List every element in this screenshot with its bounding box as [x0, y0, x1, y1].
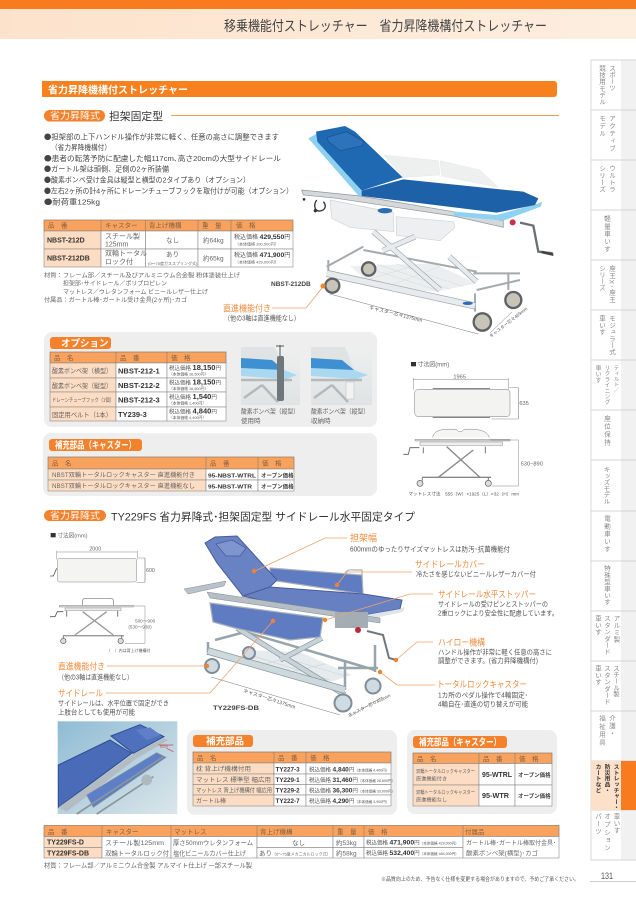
tab labels: スタンダード — [602, 665, 611, 705]
dimension: caster pitch: キャスター芯々469mm — [488, 305, 529, 340]
spec table: TY229FS: TY229FS-D — [47, 840, 84, 846]
photo captions: 使用時 — [241, 416, 261, 425]
parts table: TY227-3 — [276, 766, 300, 774]
photo captions: 収納時 — [311, 416, 331, 425]
model heading: 担架固定型 — [44, 109, 559, 123]
caster table: NBST双輪トータルロックキャスター 直進機能付き — [52, 471, 195, 479]
panel: replacement parts TY229 — [187, 730, 397, 815]
dimension: caster pitch TY229: キャスター芯々459mm — [347, 692, 392, 719]
callout: ハイロー機構: 調整ができます。(省力昇降機構付) — [438, 656, 538, 665]
materials note: マットレス／ウレタンフォーム ビニールレザー仕上げ — [63, 288, 208, 296]
options table: 固定用ベルト（1本） — [52, 410, 112, 419]
ghost side rails — [383, 155, 498, 187]
active tab: ストレッチャー・ — [612, 764, 619, 810]
callout: 担架幅 — [252, 532, 510, 573]
tab labels: 介護・ — [608, 715, 616, 737]
crank handle — [367, 631, 396, 660]
dimension drawing: TY229FS: (530〜930) — [128, 624, 152, 629]
parts table: ガートル棒 — [196, 797, 226, 805]
spec table: TY229FS: なし — [292, 839, 305, 847]
casters — [325, 262, 521, 331]
callout: サイドレール水平ストッパー: 2重ロックにより安全性に配慮しています。 — [438, 608, 558, 618]
dimension drawing: TY229FS — [50, 531, 156, 653]
callout: サイドレールカバー — [335, 560, 536, 587]
parts table: 税込価格 4,290円（本体価格 3,900円） — [309, 797, 389, 805]
options table: 税込価格 18,150円 — [169, 378, 221, 386]
stretcher illustration TY229FS-DB — [184, 536, 405, 712]
spec table: TY229FS: 付属品 — [465, 827, 484, 836]
callout: ハイロー機構 — [394, 636, 552, 665]
spec table: NBST-212: 約64kg — [203, 236, 224, 244]
callout: 直進機能付き: 直進機能付き — [223, 302, 271, 314]
pill heading: 補充部品 — [206, 736, 244, 748]
spec table: NBST-212: （本体価格 429,000円） — [235, 259, 279, 265]
caster table: 直進機能付き — [416, 774, 447, 782]
spec table: NBST-212: 双輪トータル — [105, 248, 147, 258]
callout: サイドレール水平ストッパー: サイドレールの受けピンとストッパーの — [438, 600, 548, 608]
caster table: 95-NBST-WTRL — [208, 473, 257, 479]
caster table: 双輪トータルロックキャスター — [416, 788, 475, 796]
tab labels — [594, 64, 620, 852]
tab labels: アクティブ — [608, 115, 616, 152]
callout: 直進機能付き left: （他の3軸は直進機能なし） — [58, 672, 133, 682]
top frame — [302, 190, 503, 227]
spec table: NBST-212 — [44, 220, 293, 267]
spec table: TY229FS: 塩化ビニールカバー仕上げ — [173, 848, 246, 858]
materials note: 付属品：ガートル棒･ガートル受け金具(2ヶ所)･カゴ — [44, 296, 187, 304]
header band — [0, 0, 636, 39]
options table: 酸素ボンベ架（縦型） — [52, 381, 112, 390]
top frame and mechanism — [207, 592, 380, 623]
dimension: caster pitch TY229: キャスター芯々1375mm — [242, 687, 296, 711]
spec table: TY229FS: 背上げ機構 — [260, 827, 293, 836]
callout: トータルロックキャスター: 1カ所のペダル操作で4輪固定･ — [438, 690, 528, 700]
callout: サイドレール left: 上肢台としても使用が可能 — [58, 708, 135, 716]
spec table: TY229FS: キャスター — [106, 827, 138, 836]
pillow — [216, 540, 246, 556]
side elevation — [433, 429, 489, 437]
dimension drawing: NBST-212: マットレス寸法 555（W）×1925（L）×32（H）mm — [408, 491, 519, 498]
options table: （本体価格 16,500円） — [169, 386, 208, 391]
options table: 税込価格 1,540円 — [169, 392, 217, 401]
spec table: NBST-212: （本体価格 390,500円） — [235, 241, 279, 247]
parts table: TY229-2 — [276, 788, 300, 794]
casters — [205, 647, 380, 712]
backrest — [205, 536, 277, 596]
materials note — [44, 272, 240, 304]
spec table: TY229FS: 酸素ボンベ架(横型)･カゴ — [466, 850, 538, 858]
tab labels: 車いす — [594, 614, 602, 635]
model label: NBST-212DB — [271, 281, 311, 288]
photo: oxygen cylinder rack in use — [241, 345, 300, 405]
tab labels: モジュラー式 — [608, 315, 616, 355]
tab labels: 電動車いす — [602, 515, 611, 553]
dimension: caster pitch TY229 — [211, 677, 392, 719]
photo: side rail as arm rest: 約200 — [160, 743, 168, 748]
tab labels: 車いす — [594, 664, 602, 685]
base frame — [208, 651, 345, 690]
parts table: 品 名 — [197, 753, 216, 762]
callout: トータルロックキャスター — [378, 670, 528, 708]
options table: 価 格 — [171, 353, 191, 362]
parts table: TY229-1 — [276, 777, 300, 784]
caster table: 95-WTRL — [482, 772, 513, 779]
active tab: 防災用品・ — [603, 763, 610, 793]
tab labels: 特殊型車いす — [602, 564, 611, 605]
parts table: マットレス 標準型 幅広用 — [196, 776, 271, 784]
dimension drawing: NBST-212: 寸法図(mm) — [417, 361, 449, 369]
model heading: 担架固定型: 担架固定型 — [109, 109, 163, 123]
photo captions: 酸素ボンベ架（縦型） — [241, 406, 299, 416]
options table: 税込価格 18,150円 — [169, 363, 221, 372]
tab labels: リクライニング — [603, 365, 610, 406]
options pill heading: オプション — [61, 338, 109, 350]
spec table: NBST-212: 品 番 — [48, 222, 68, 230]
crank handle — [520, 223, 553, 253]
feature bullet list — [44, 132, 293, 208]
tab labels: ウルトラ — [608, 165, 616, 193]
dimension drawing: NBST-212: 635 — [519, 401, 529, 407]
feature bullet list: ●耐荷重125kg — [44, 198, 100, 208]
spec table: NBST-212: キャスター — [105, 220, 138, 230]
caster table: 95-WTR — [482, 793, 509, 800]
callout: トータルロックキャスター: 4輪自在･直進の切り替えが可能 — [438, 700, 528, 708]
tab labels: スポーツ — [608, 65, 616, 91]
options table: NBST-212-3 — [118, 396, 160, 404]
callout: サイドレール left: サイドレール — [58, 688, 103, 698]
scissor legs and base — [373, 232, 477, 290]
tab labels: ティルト／ — [612, 365, 619, 393]
feature bullet list: ●酸素ボンベ受け金具は縦型と横型の2タイプあり（オプション） — [44, 176, 250, 186]
active tab — [591, 761, 636, 810]
tab labels: シリーズ — [598, 265, 606, 291]
dimension drawing: NBST-212: 1965 — [453, 375, 466, 381]
dimension: caster pitch — [330, 294, 529, 340]
parts table: 税込価格 36,300円（本体価格 33,000円） — [309, 786, 395, 794]
callout: ハイロー機構: ハンドル操作が非常に軽く任意の高さに — [438, 648, 552, 656]
spec table: TY229FS: 厚さ50mmウレタンフォーム — [173, 838, 253, 847]
spec table: NBST-212: スチール製 — [105, 232, 140, 240]
panel: replacement casters NBST — [43, 433, 377, 496]
dimension drawing: TY229FS: 600 — [146, 568, 155, 574]
model label: TY229FS-DB — [213, 705, 259, 712]
caster table: 価 格 — [519, 754, 539, 763]
callout: 直進機能付き — [223, 284, 326, 322]
photo: side rail as arm rest — [58, 721, 177, 814]
spec table: NBST-212: 約65kg — [203, 254, 224, 262]
feature bullet list: ●患者の転落予防に配慮した幅117cm､高さ20cmの大型サイドレール — [44, 154, 281, 164]
page number — [590, 871, 636, 882]
sidebar index tabs — [591, 60, 636, 860]
parts table: TY222-7 — [276, 798, 300, 805]
spec table: NBST-212: NBST-212D — [47, 238, 85, 244]
caster table — [48, 457, 294, 491]
spec table: TY229FS: 価 格 — [368, 827, 388, 836]
model heading: TY229FS — [44, 510, 415, 524]
front side rail — [210, 603, 323, 640]
spec table: NBST-212: 重 量 — [202, 222, 222, 230]
stretcher illustration NBST-212DB — [302, 126, 553, 331]
model heading: 担架固定型: 省力昇降式 — [50, 110, 101, 122]
parts table: 価 格 — [310, 753, 330, 762]
spec table: TY229FS: TY229FS-DB — [47, 850, 89, 858]
spec table: TY229FS: 約53kg — [336, 838, 357, 847]
pill heading: 補充部品（キャスター） — [419, 736, 501, 748]
tab labels: 福祉用具 — [598, 714, 606, 747]
caster table: 品 番 — [210, 460, 230, 468]
caster table: 価 格 — [262, 458, 282, 468]
caster table: オープン価格 — [518, 771, 551, 779]
dimension drawing: NBST-212: 530−890 — [521, 462, 543, 468]
caster table: 品 番 — [483, 755, 503, 763]
rear side rail — [270, 568, 363, 594]
tab labels: 座位保持 — [602, 415, 611, 447]
caster table: 品 名 — [52, 458, 72, 468]
options table: TY239-3 — [118, 410, 147, 419]
tab labels: アルミ製 — [612, 615, 620, 644]
spec table: NBST-212: 税込価格 471,900円 — [234, 251, 290, 259]
page number: 131 — [601, 871, 613, 882]
light blue edge of bed — [308, 134, 363, 197]
options table: NBST-212-2 — [118, 381, 160, 390]
parts table: 枕 背上げ機構付用 — [196, 765, 251, 773]
scissor legs — [237, 628, 345, 695]
tab labels: シリーズ — [598, 165, 606, 193]
spec table: NBST-212: NBST-212DB — [47, 256, 90, 262]
tab labels: モデル — [598, 115, 606, 137]
model heading: TY229FS: 省力昇降式 — [50, 510, 101, 522]
caster table: オープン価格 — [518, 792, 551, 800]
caster table: 95-NBST-WTR — [208, 484, 253, 490]
model heading: TY229FS: TY229FS 省力昇降式･担架固定型 サイドレール水平固定タイプ — [111, 510, 415, 524]
spec table: NBST-212: なし — [166, 236, 179, 244]
spec table: NBST-212: 125mm — [105, 242, 129, 248]
tab labels: スタンダード — [602, 615, 611, 655]
parts table: 税込価格 31,460円（本体価格 28,600円） — [309, 776, 395, 784]
options table: （本体価格 4,400円） — [169, 415, 206, 420]
dimension: caster pitch: キャスター芯々1375mm — [369, 304, 423, 324]
footnote: ※品質向上のため、予告なく仕様を変更する場合がありますので、予めご了承ください。 — [381, 875, 579, 883]
frame rods — [327, 247, 520, 312]
callout: 担架幅: 担架幅 — [350, 532, 377, 543]
callout: サイドレールカバー: サイドレールカバー — [415, 560, 485, 570]
caster table: 直進機能なし — [416, 796, 447, 804]
spec table: TY229FS: あり（0〜75度メカニカルロック式） — [259, 850, 331, 858]
parts table — [193, 752, 395, 806]
feature bullet list: （省力昇降機構付） — [51, 143, 111, 152]
tab labels: 車いす — [594, 364, 601, 383]
photo captions: 酸素ボンベ架（縦型） — [311, 406, 369, 416]
options pill heading — [50, 337, 111, 350]
photo captions — [241, 406, 369, 425]
spec table: TY229FS: スチール製125mm — [105, 838, 164, 847]
tab labels: キッズモデル — [602, 466, 610, 504]
tab labels: 座王X･座王 — [608, 265, 616, 303]
spec table: TY229FS — [44, 826, 559, 858]
options table: 品 名 — [54, 353, 74, 362]
basket — [350, 263, 477, 292]
caster table: 双輪トータルロックキャスター — [416, 767, 475, 775]
spec table: TY229FS: 重 量 — [337, 828, 357, 836]
caster table: 品 名 — [417, 754, 436, 763]
options table: （本体価格 16,500円） — [169, 372, 208, 376]
spec table: NBST-212: 背上げ機構 — [149, 220, 182, 230]
callout: 直進機能付き: （他の3軸は直進機能なし） — [224, 314, 300, 322]
materials note: 材質：フレーム部／スチール及びアルミニウム合金製 粉体塗装仕上げ — [44, 272, 240, 280]
active tab: カートなど — [594, 764, 601, 793]
parts table: マットレス 背上げ機構付 幅広用 — [196, 786, 272, 794]
caster table: オープン価格 — [261, 482, 294, 490]
materials note TY229: 材質：フレーム部／アルミニウム合金製 アルマイト仕上げ 一部スチール製 — [44, 860, 253, 870]
panel: options — [44, 332, 377, 427]
caster table: オープン価格 — [261, 471, 294, 479]
spec table: NBST-212: 価 格 — [236, 220, 256, 230]
tab labels: オプション — [602, 813, 611, 852]
frame rods — [208, 632, 378, 690]
spec table: TY229FS: 約58kg — [336, 848, 357, 858]
tab labels: 軽量車いす — [602, 214, 611, 253]
dimension drawing: TY229FS: （ ）内は背上げ機構付 — [107, 647, 151, 653]
tab labels: スチール製 — [612, 665, 619, 698]
callout: 直進機能付き left: 直進機能付き — [58, 660, 105, 672]
materials note: 担架部･サイドレール／ポリプロピレン — [63, 280, 167, 288]
feature bullet list: ●左右2ヶ所の計4ヶ所にドレーンチューブフックを取付けが可能（オプション） — [44, 186, 293, 196]
options table: ドレーンチューブフック（1個） — [52, 396, 114, 404]
spec table: TY229FS: 双輪トータルロック付 — [105, 848, 169, 858]
spec table: NBST-212: ロック付 — [105, 257, 133, 266]
photo: oxygen cylinder rack stored — [311, 347, 372, 405]
section heading bar: 省力昇降機構付ストレッチャー — [48, 84, 188, 96]
feature bullet list: ●担架部の上下ハンドル操作が非常に軽く、任意の高さに調整できます — [44, 132, 279, 142]
spec table: TY229FS: 税込価格 532,400円（本体価格 484,000円） — [366, 849, 459, 857]
spec table: TY229FS: ガートル棒･ガートル棒取付金具･ — [466, 839, 556, 847]
callout: トータルロックキャスター: トータルロックキャスター — [437, 680, 527, 690]
dimension drawing: TY229FS: 寸法図(mm) — [57, 531, 88, 539]
tab labels: 車いす — [612, 812, 620, 833]
options table — [50, 352, 226, 421]
pill heading — [193, 735, 253, 748]
options table: 品 番 — [120, 354, 140, 362]
spec table: TY229FS: マットレス — [174, 828, 206, 836]
options table: 税込価格 4,840円 — [169, 406, 217, 416]
caster table — [413, 753, 552, 806]
parts table: 税込価格 4,840円（本体価格 4,400円） — [309, 765, 389, 773]
callout: サイドレール left: サイドレールは、水平位置で固定ができ — [58, 698, 169, 708]
options table: （本体価格 1,400円） — [169, 400, 206, 406]
dimension drawing: TY229FS: 2000 — [89, 547, 101, 553]
spec table: NBST-212: (0〜75度ガススプリング式) — [148, 260, 198, 266]
spec table: TY229FS: 品 番 — [48, 828, 68, 836]
callout: 担架幅: 600mmのゆったりサイズマットレスは防汚･抗菌機能付 — [350, 544, 510, 554]
caster table: NBST双輪トータルロックキャスター 直進機能なし — [52, 482, 195, 490]
blue backrest — [316, 126, 403, 191]
callout: サイドレール left — [58, 619, 275, 716]
pill heading: 補充部品（キャスター） — [55, 440, 136, 452]
basket — [240, 650, 352, 682]
tab labels: 車いす — [598, 314, 606, 335]
callout: 直進機能付き left — [58, 660, 209, 682]
seat mattress — [243, 587, 402, 616]
dimension drawing: NBST-212 — [403, 361, 543, 498]
options table: 酸素ボンベ架（横型） — [52, 366, 112, 375]
spec table: NBST-212: 税込価格 429,550円 — [234, 233, 290, 241]
options table: NBST-212-1 — [118, 366, 160, 376]
section heading bar — [42, 81, 557, 97]
callout: サイドレール水平ストッパー: サイドレール水平ストッパー — [438, 588, 536, 600]
spec table: TY229FS: 税込価格 471,900円（本体価格 429,000円） — [366, 838, 459, 846]
page title: 移乗機能付ストレッチャー 省力昇降機構付ストレッチャー — [224, 18, 547, 34]
callout: ハイロー機構: ハイロー機構 — [438, 636, 485, 648]
tab labels: パーツ — [594, 813, 602, 835]
feature bullet list: ●ガートル架は頭側、足側の2ヶ所装備 — [44, 165, 170, 175]
parts table: 品 番 — [278, 754, 298, 762]
tab labels: 競技用モデル — [598, 64, 606, 105]
gatch frame — [184, 581, 226, 594]
panel: replacement casters TY229 — [407, 730, 557, 814]
callout: サイドレール水平ストッパー — [323, 588, 558, 622]
spec table: NBST-212: あり — [166, 250, 179, 258]
callout: サイドレールカバー: 冷たさを感じないビニールレザーカバー付 — [416, 570, 536, 578]
dimension drawing: TY229FS: 500〜900 — [135, 619, 156, 624]
